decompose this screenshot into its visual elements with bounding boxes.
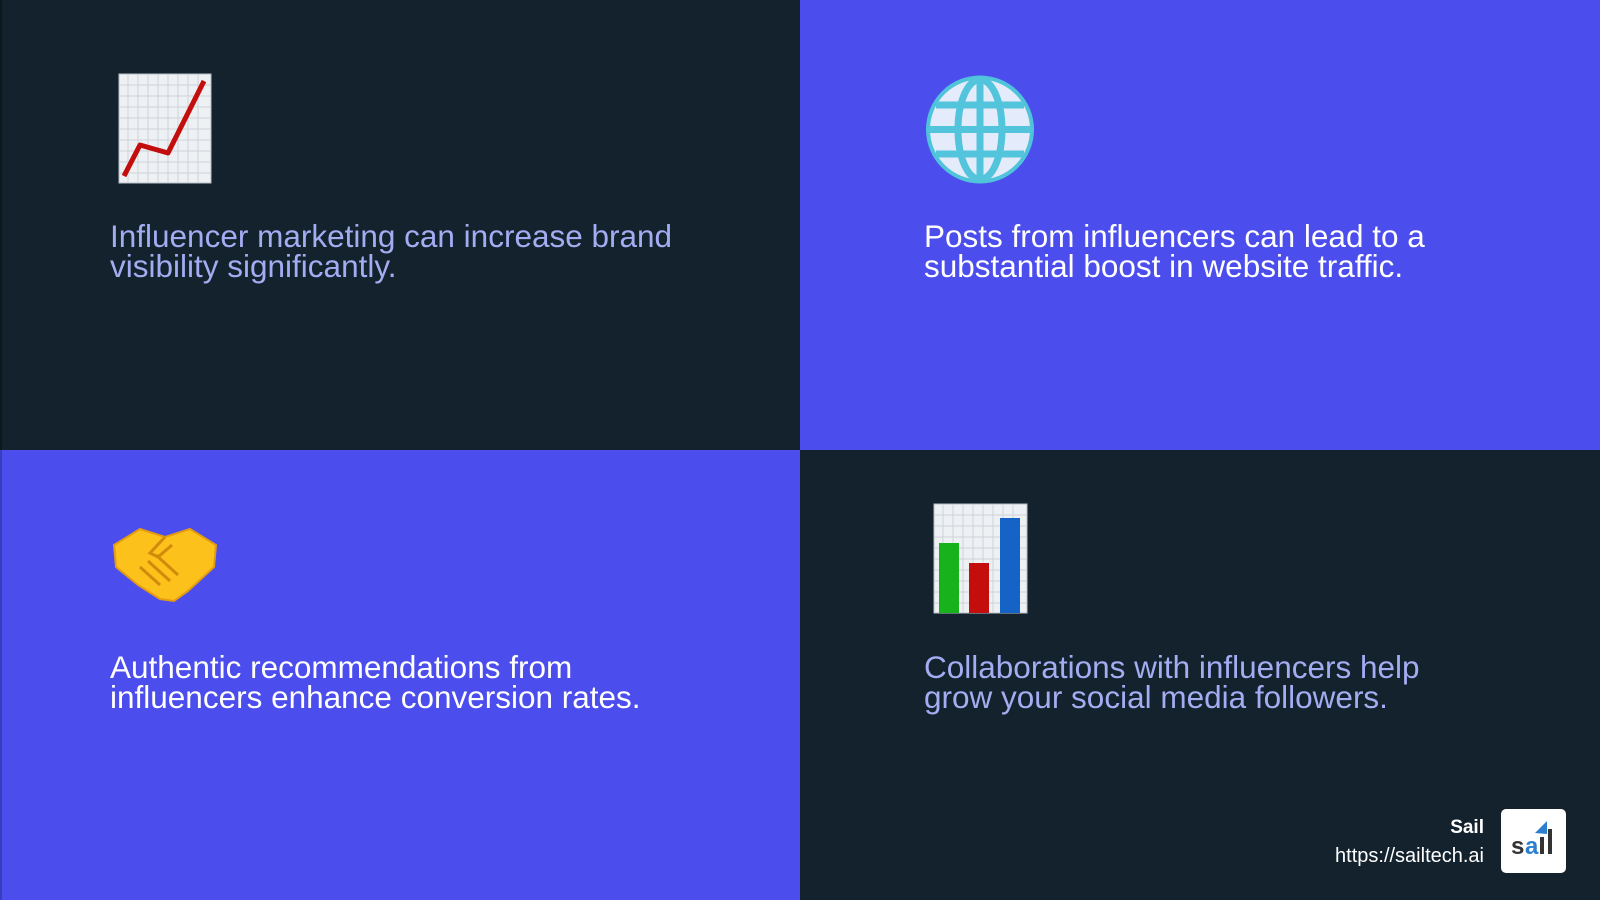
icon: bar chart bbox=[934, 504, 1028, 614]
icon: chart increasing bbox=[118, 74, 212, 184]
text: conversion rates: Authentic recommendations from influencers enhance conversion rates. bbox=[110, 649, 641, 715]
brand name: Sail bbox=[1450, 817, 1484, 838]
text: social followers: Collaborations with influencers help grow your social media followers. bbox=[924, 649, 1420, 715]
panel: social followers bbox=[800, 450, 1600, 900]
logo: s bbox=[1511, 833, 1524, 860]
text: website traffic: Posts from influencers can lead to a substantial boost in website traffic. bbox=[924, 218, 1425, 284]
panel: website traffic bbox=[800, 0, 1600, 450]
logo bbox=[1501, 809, 1566, 873]
icon: handshake bbox=[112, 528, 218, 602]
brand footer bbox=[1335, 809, 1566, 873]
icon: globe bbox=[926, 76, 1034, 184]
logo: a bbox=[1525, 833, 1539, 860]
text: brand visibility: Influencer marketing can increase brand visibility significantly. bbox=[110, 218, 672, 284]
brand url: https://sailtech.ai bbox=[1335, 845, 1484, 867]
panel: brand visibility bbox=[0, 0, 800, 450]
panel: conversion rates bbox=[0, 450, 800, 900]
